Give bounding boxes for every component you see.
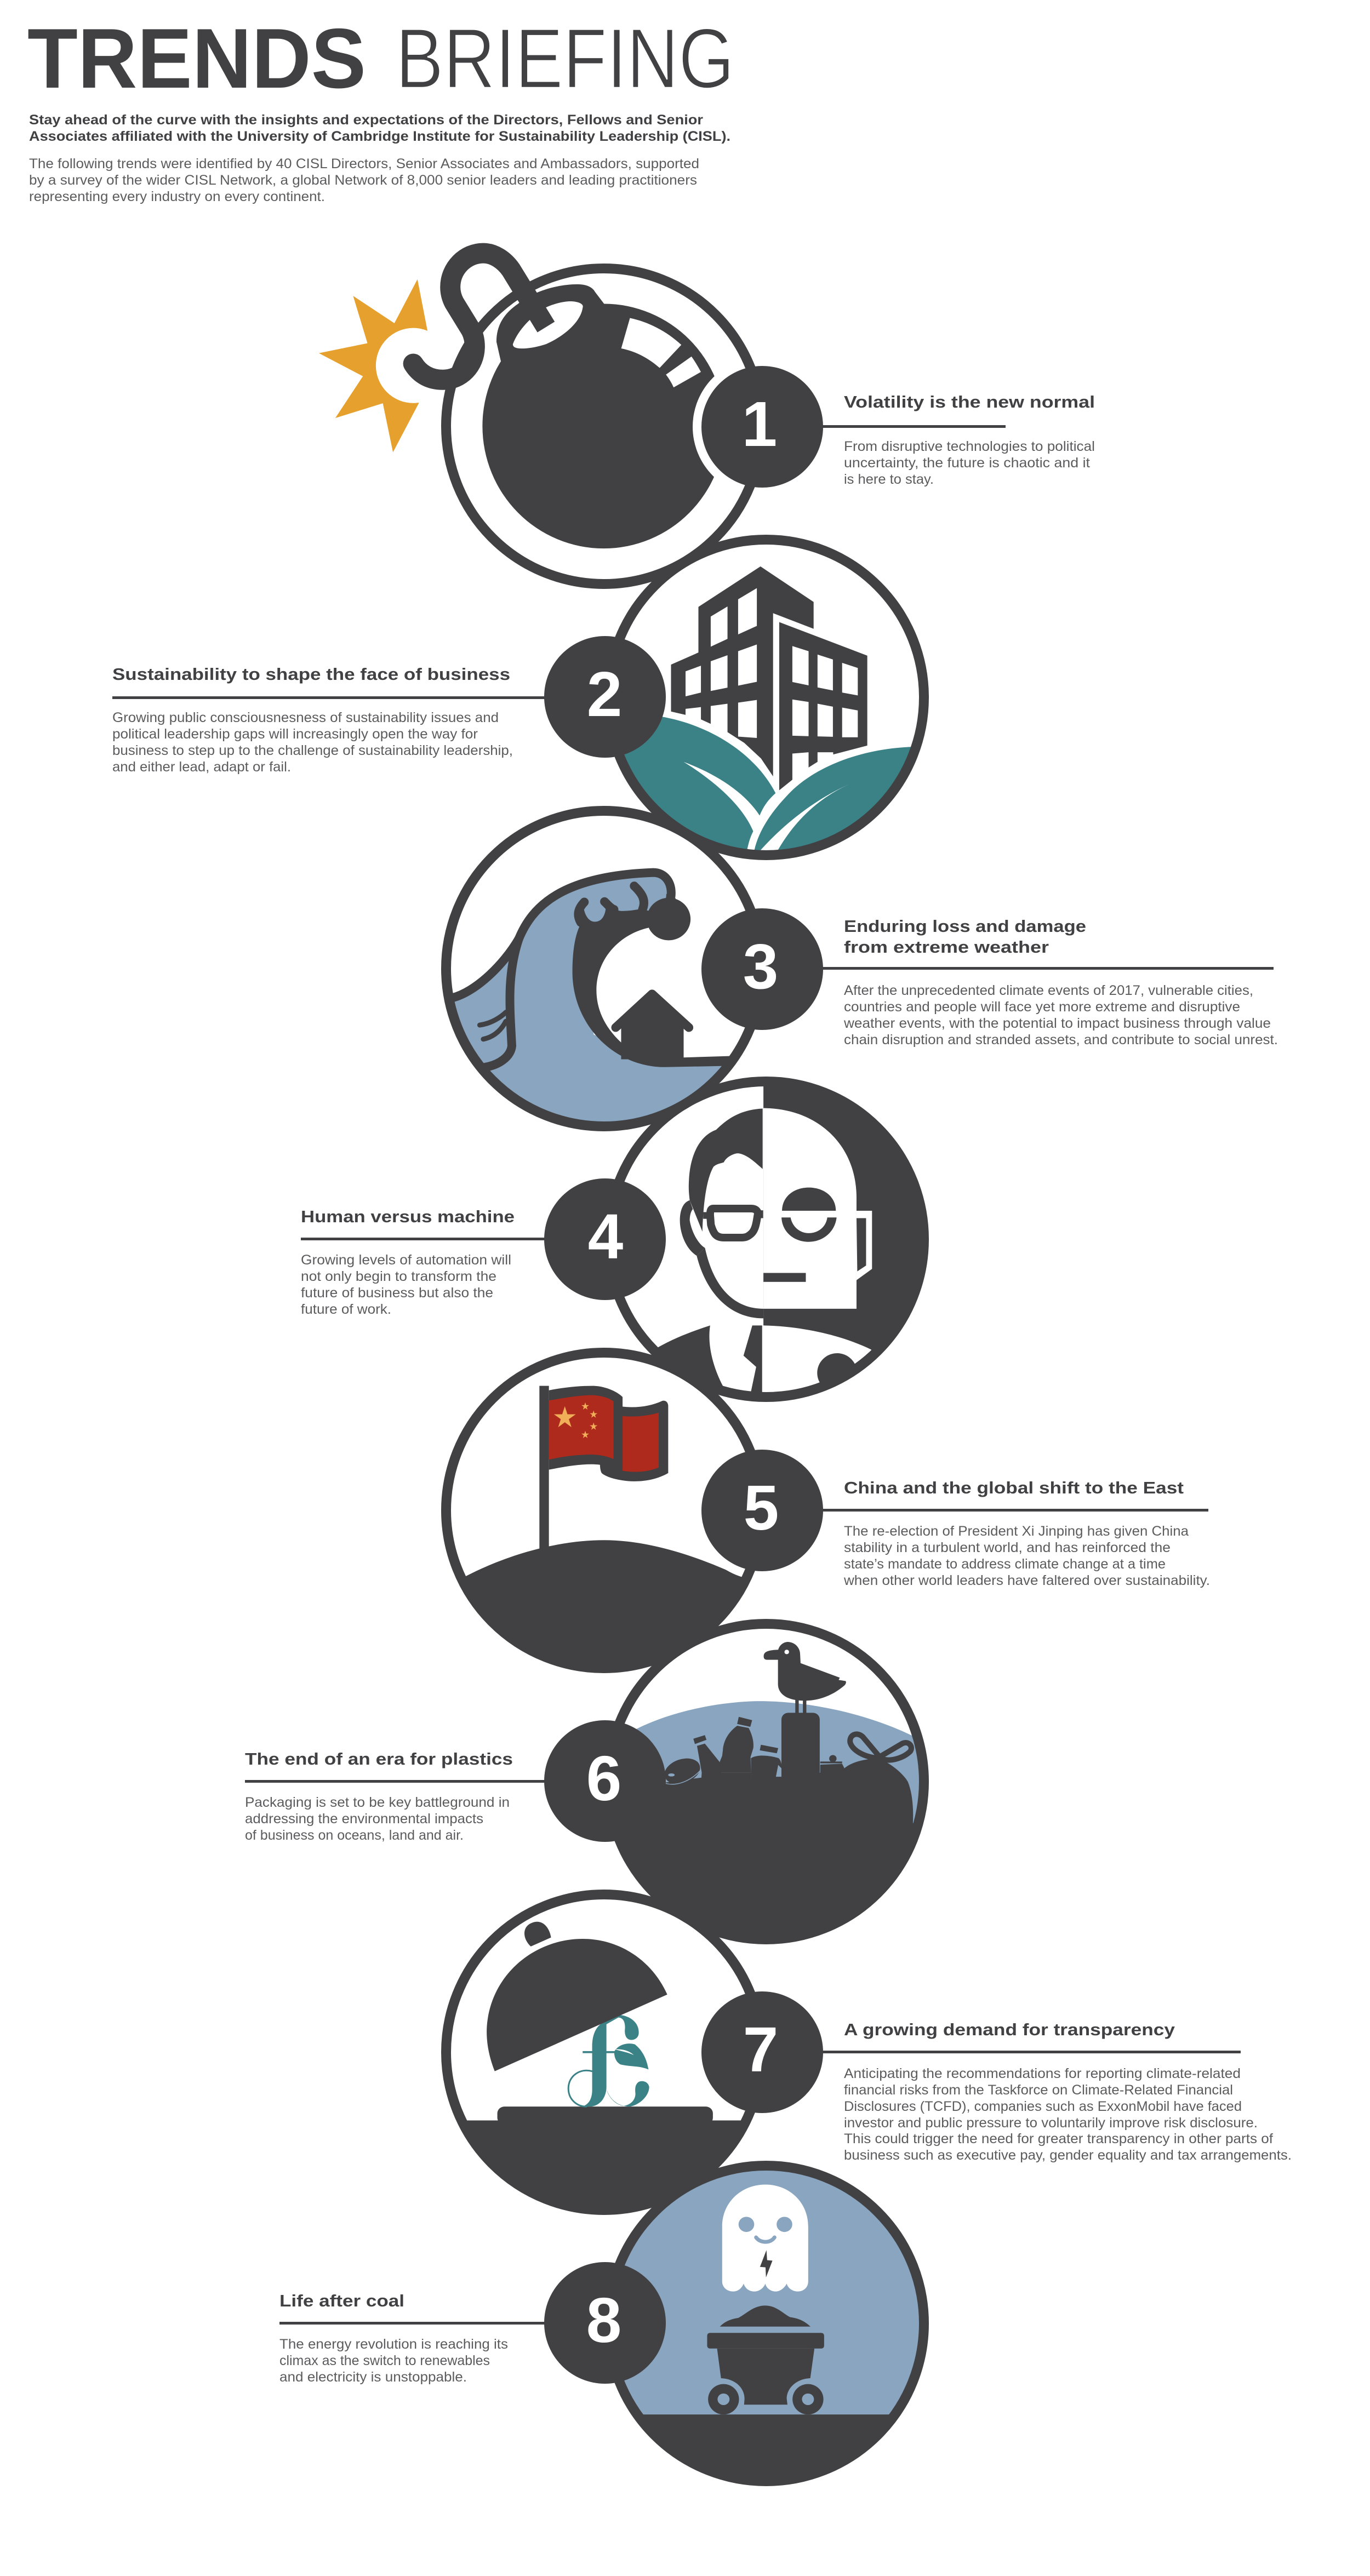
body text: political leadership gaps will increasingly open the way for: [112, 726, 478, 742]
heading: Life after coal: [279, 2291, 404, 2310]
body text: The re-election of President Xi Jinping has given China: [844, 1524, 1189, 1539]
body text: addressing the environmental impacts: [245, 1811, 483, 1827]
body text: Growing levels of automation will: [301, 1252, 511, 1268]
body text: From disruptive technologies to political: [844, 439, 1095, 454]
trend 1: volatility: [319, 253, 1095, 584]
trend 3: extreme weather: [427, 811, 1278, 1150]
body text: investor and public pressure to voluntarily improve risk disclosure.: [844, 2115, 1258, 2131]
icon: half human half robot face: [658, 1086, 919, 1392]
body text: [843, 983, 1278, 1047]
heading: Volatility is the new normal: [844, 392, 1095, 411]
number badge 7: 7: [743, 2014, 778, 2085]
heading: A growing demand for transparency: [844, 2020, 1175, 2039]
title: [27, 11, 734, 106]
number badge 2: [544, 636, 666, 758]
heading: The end of an era for plastics: [245, 1749, 513, 1768]
icon: cloche revealing pound sign: [467, 1922, 741, 2205]
icon: wave over house: [453, 868, 729, 1121]
icon: spark star: [319, 279, 450, 453]
body text: future of business but also the: [301, 1285, 493, 1301]
number badge 2: 2: [587, 659, 622, 730]
heading: from extreme weather: [844, 937, 1049, 957]
intro paragraph: by a survey of the wider CISL Network, a global Network of 8,000 senior leaders and leading practitioners: [29, 173, 697, 188]
body text: Disclosures (TCFD), companies such as ExxonMobil have faced: [844, 2099, 1242, 2114]
heading: Sustainability to shape the face of business: [112, 665, 510, 684]
trend 5: china: [433, 1353, 1210, 1700]
body text: is here to stay.: [844, 472, 934, 487]
number badge 6: 6: [586, 1743, 621, 1814]
number badge 5: [701, 1450, 823, 1571]
body text: business such as executive pay, gender equality and tax arrangements.: [844, 2148, 1292, 2163]
icon: fuse: [403, 253, 546, 380]
icon: ghost over coal cart: [643, 2185, 889, 2476]
body text: This could trigger the need for greater transparency in other parts of: [844, 2131, 1273, 2146]
title: BRIEFING: [396, 11, 734, 106]
body text: state’s mandate to address climate change at a time: [844, 1556, 1166, 1572]
body text: [301, 1252, 511, 1317]
body text: financial risks from the Taskforce on Climate-Related Financial: [844, 2082, 1233, 2098]
body text: Packaging is set to be key battleground in: [245, 1795, 510, 1810]
title: TRENDS: [27, 11, 366, 106]
intro paragraph: [29, 156, 699, 204]
body text: Growing public consciousnesness of sustainability issues and: [112, 710, 499, 725]
intro paragraph: The following trends were identified by 40 CISL Directors, Senior Associates and Ambassadors, supported: [29, 156, 699, 171]
icon: chinese flag on hill: [466, 1386, 742, 1663]
number badge 8: 8: [586, 2285, 621, 2356]
body text: business to step up to the challenge of sustainability leadership,: [112, 743, 513, 758]
intro paragraph: representing every industry on every continent.: [29, 189, 325, 204]
number badge 1: [701, 366, 823, 488]
heading: China and the global shift to the East: [844, 1478, 1184, 1497]
trend 8: life after coal: [279, 2161, 929, 2486]
number badge 3: [701, 908, 823, 1030]
number badge 8: [544, 2262, 666, 2384]
body text: Anticipating the recommendations for reporting climate-related: [844, 2066, 1241, 2081]
number badge 1: 1: [742, 388, 777, 460]
body text: [279, 2337, 508, 2385]
heading: Human versus machine: [301, 1207, 515, 1226]
body text: weather events, with the potential to impact business through value: [843, 1016, 1271, 1031]
body text: stability in a turbulent world, and has reinforced the: [844, 1540, 1171, 1555]
icon: seagull on plastic waste: [624, 1642, 919, 1934]
intro subtitle: Stay ahead of the curve with the insights and expectations of the Directors, Fellows and Senior: [29, 112, 703, 128]
body text: chain disruption and stranded assets, and contribute to social unrest.: [844, 1032, 1278, 1047]
body text: and electricity is unstoppable.: [279, 2369, 467, 2385]
number badge 3: 3: [743, 931, 778, 1002]
number badge 7: [701, 1991, 823, 2113]
number badge 6: [544, 1720, 666, 1842]
trend 7: transparency: [433, 1894, 1292, 2232]
heading: Enduring loss and damage: [844, 917, 1086, 936]
body text: [245, 1795, 510, 1843]
icon: bomb: [482, 284, 715, 549]
number badge 5: 5: [744, 1472, 779, 1543]
icon: building with leaves: [624, 566, 911, 850]
trend 2: sustainability: [112, 540, 959, 877]
body text: After the unprecedented climate events of 2017, vulnerable cities,: [844, 983, 1253, 998]
body text: countries and people will face yet more extreme and disruptive: [844, 999, 1240, 1015]
intro subtitle: [29, 112, 730, 144]
body text: of business on oceans, land and air.: [245, 1828, 464, 1843]
trend 4: human vs machine: [301, 1077, 929, 1402]
heading: [844, 917, 1086, 957]
intro subtitle: Associates affiliated with the University of Cambridge Institute for Sustainability Leadership (CISL).: [29, 129, 730, 144]
body text: [844, 2066, 1292, 2163]
body text: The energy revolution is reaching its: [279, 2337, 508, 2352]
body text: and either lead, adapt or fail.: [112, 759, 291, 775]
trend 6: plastics: [245, 1624, 938, 1974]
body text: climax as the switch to renewables: [279, 2353, 490, 2368]
number badge 4: [544, 1178, 666, 1300]
body text: not only begin to transform the: [301, 1269, 496, 1284]
number badge 4: 4: [588, 1201, 623, 1272]
body text: future of work.: [301, 1302, 391, 1317]
body text: [844, 439, 1095, 487]
body text: [843, 1524, 1210, 1588]
body text: when other world leaders have faltered over sustainability.: [843, 1573, 1210, 1588]
body text: [112, 710, 513, 775]
body text: uncertainty, the future is chaotic and it: [844, 455, 1090, 471]
